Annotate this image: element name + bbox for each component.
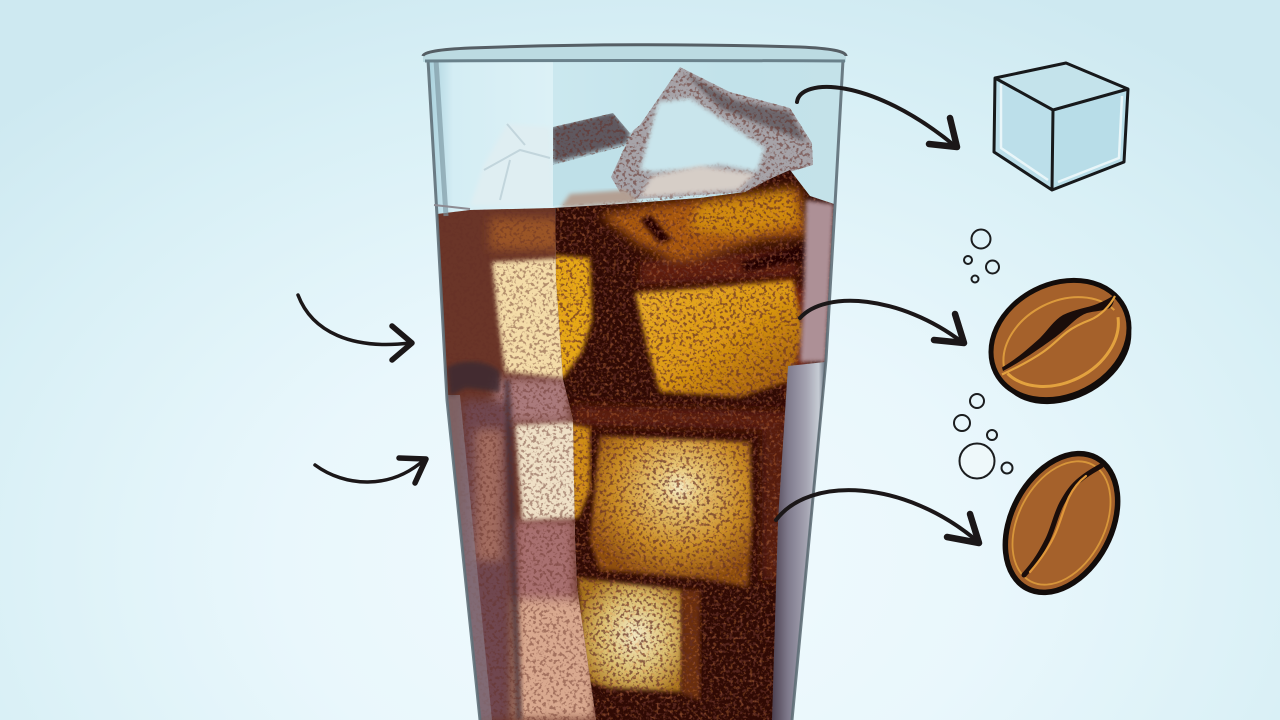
golden ice cube upper right bbox=[635, 280, 803, 397]
golden ice cube bottom bbox=[578, 578, 682, 692]
golden ice cube upper left bbox=[553, 255, 592, 378]
liquid, saturated right pane bbox=[430, 170, 843, 720]
ice cubes above the liquid bbox=[470, 60, 823, 208]
icon: upper coffee bean bbox=[970, 257, 1152, 427]
icon: bubbles upper bbox=[964, 230, 999, 282]
arrow: to upper coffee bean bbox=[800, 301, 964, 343]
arrow: to lower coffee bean bbox=[776, 490, 979, 543]
arrow: left upper, pointing to glass bbox=[298, 295, 412, 360]
empty upper glass bbox=[428, 60, 843, 216]
golden ice cube centre bbox=[590, 436, 752, 587]
glass of iced cola bbox=[423, 45, 846, 720]
icon: sugar cube bbox=[994, 63, 1128, 190]
lower glass ridge left bbox=[447, 362, 500, 396]
icon: bubbles lower bbox=[954, 394, 1012, 478]
thick lower glass wall right bbox=[772, 362, 825, 720]
golden ice cube left sliver bbox=[570, 424, 590, 518]
right glass wall with liquid lens bbox=[800, 200, 834, 362]
glass rim bbox=[423, 45, 846, 62]
pale ice cube upper left bbox=[492, 258, 565, 378]
pale ice cube lower left bbox=[515, 422, 578, 520]
arrow: left lower, pointing to glass bbox=[315, 458, 426, 483]
icon: lower coffee bean bbox=[983, 434, 1140, 612]
arrow: to sugar cube bbox=[797, 87, 957, 147]
dark streaks in upper liquid bbox=[640, 214, 805, 272]
lower glass wall left bbox=[447, 395, 492, 720]
glass outlines bbox=[428, 60, 843, 720]
liquid, muted left pane bbox=[430, 205, 600, 720]
